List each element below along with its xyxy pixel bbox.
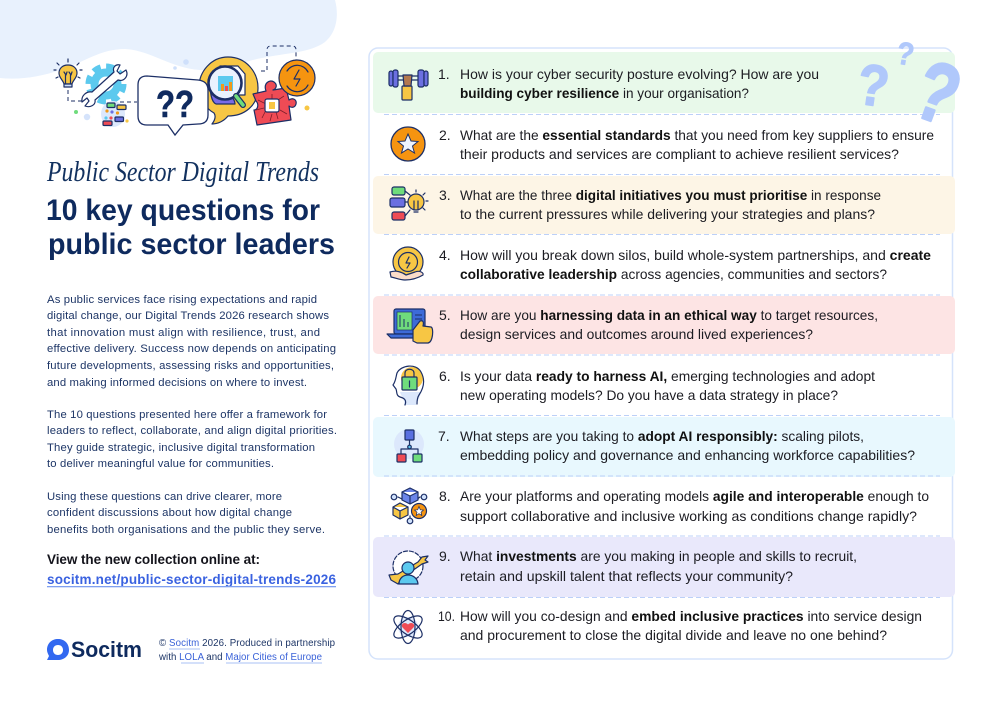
icon: hand and energy — [390, 247, 423, 280]
icon: head with padlock — [393, 366, 424, 405]
question 5: design services and outcomes around lived experiences? — [460, 326, 813, 342]
question 10: and procurement to close the digital divide and leave no one behind? — [460, 627, 887, 643]
call to action: View the new collection online at: — [47, 552, 260, 567]
framework paragraph: The 10 questions presented here offer a framework for — [47, 409, 327, 421]
decorative question marks — [853, 36, 973, 143]
question 7 — [394, 428, 915, 463]
hero illustration — [54, 46, 315, 135]
main heading: 10 key questions for — [46, 194, 320, 227]
intro paragraph — [47, 294, 336, 389]
question speech bubble: ?? — [156, 84, 194, 126]
question 10: 10. — [438, 608, 455, 624]
decorative question marks: ? — [853, 51, 893, 120]
question 3: to the current pressures while delivering your strategies and plans? — [460, 206, 875, 222]
yellow speech bubble and magnifier — [199, 57, 258, 124]
copyright note: with LOLA and Major Cities of Europe — [158, 652, 322, 663]
closing paragraph: confident discussions about how digital change — [47, 507, 292, 519]
background blob — [0, 0, 337, 79]
decorative question marks: ? — [903, 42, 973, 143]
question 5: 5. — [439, 307, 451, 323]
question 4: 4. — [439, 247, 451, 263]
question 5 — [387, 307, 878, 343]
icon: decision flow — [394, 429, 424, 462]
closing paragraph — [47, 491, 325, 536]
intro paragraph: digital change, our Digital Trends 2026 research shows — [47, 310, 329, 322]
decorative question marks: ? — [894, 36, 917, 73]
icon: person with gear and wrench — [389, 551, 428, 584]
question 2: their products and services are compliant to achieve resilient services? — [460, 146, 899, 162]
framework paragraph — [47, 409, 337, 470]
intro paragraph: effective delivery. Success now depends on anticipating — [47, 343, 336, 355]
question 2: 2. — [439, 127, 451, 143]
question 3: 3. — [439, 187, 451, 203]
copyright note: © Socitm 2026. Produced in partnership — [159, 638, 335, 649]
question 1 — [389, 66, 819, 101]
question 10 — [390, 608, 922, 644]
icon: atom with heart — [390, 610, 426, 644]
question 8 — [391, 488, 929, 524]
question 9 — [389, 548, 857, 584]
framework paragraph: They guide strategic, inclusive digital transformation — [47, 442, 315, 454]
colour blocks — [101, 101, 129, 127]
call to action — [47, 552, 336, 587]
question 7: What steps are you taking to adopt AI responsibly: scaling pilots, — [460, 428, 864, 444]
question 8: 8. — [439, 488, 451, 504]
framework paragraph: to deliver meaningful value for communities. — [47, 458, 274, 470]
question 5: How are you harnessing data in an ethical way to target resources, — [460, 307, 878, 323]
call to action: socitm.net/public-sector-digital-trends-2026 — [47, 572, 336, 587]
framework paragraph: leaders to reflect, collaborate, and align digital priorities. — [47, 425, 337, 437]
icon: connected cubes — [391, 488, 427, 524]
question 7: embedding policy and governance and enhancing workforce capabilities? — [460, 447, 915, 463]
main heading — [46, 194, 335, 261]
intro paragraph: future developments, assessing risks and opportunities, — [47, 360, 334, 372]
question 1: How is your cyber security posture evolving? How are you — [460, 66, 819, 82]
question 9: 9. — [439, 548, 451, 564]
question 6: new operating models? Do you have a data strategy in place? — [460, 387, 838, 403]
question 8: Are your platforms and operating models agile and interoperable enough to — [460, 488, 929, 504]
icon: star badge — [391, 127, 425, 161]
row backgrounds — [373, 52, 955, 597]
main heading: public sector leaders — [48, 228, 335, 261]
Socitm logo: Socitm — [71, 637, 142, 662]
icon: dumbbell — [389, 70, 428, 100]
questions panel — [369, 48, 952, 659]
question 3 — [390, 187, 881, 222]
question 1: 1. — [438, 66, 450, 82]
question 1: building cyber resilience in your organisation? — [460, 85, 749, 101]
bulb — [54, 59, 82, 87]
question 10: How will you co-design and embed inclusive practices into service design — [460, 608, 922, 624]
question 6: Is your data ready to harness AI, emerging technologies and adopt — [460, 368, 875, 384]
question 4: collaborative leadership across agencies, communities and sectors? — [460, 266, 887, 282]
question speech bubble — [138, 76, 208, 135]
red puzzle — [253, 81, 296, 125]
intro paragraph: and making informed decisions on where to invest. — [47, 377, 307, 389]
icon: laptop and thumbs up — [387, 309, 433, 343]
question 4 — [390, 247, 931, 282]
question 8: support collaborative and inclusive working as conditions change rapidly? — [460, 508, 917, 524]
gear and wrench — [82, 65, 127, 107]
question 7: 7. — [438, 428, 450, 444]
question 4: How will you break down silos, build whole-system partnerships, and create — [460, 247, 931, 263]
question 2 — [391, 127, 934, 162]
question 9: retain and upskill talent that reflects your community? — [460, 568, 793, 584]
question 6: 6. — [439, 368, 451, 384]
question 2: What are the essential standards that you need from key suppliers to ensure — [460, 127, 934, 143]
icon: initiatives and bulb — [390, 187, 428, 220]
question 9: What investments are you making in people and skills to recruit, — [460, 548, 857, 564]
copyright note — [158, 638, 335, 663]
intro paragraph: As public services face rising expectations and rapid — [47, 294, 317, 306]
question 3: What are the three digital initiatives you must prioritise in response — [460, 187, 881, 203]
script title: Public Sector Digital Trends — [46, 157, 319, 188]
question 6 — [393, 366, 875, 405]
intro paragraph: that innovation must align with resilience, trust, and — [47, 327, 320, 339]
closing paragraph: Using these questions can drive clearer, more — [47, 491, 282, 503]
closing paragraph: benefits both organisations and the public they serve. — [47, 524, 325, 536]
orange energy circle — [279, 60, 315, 96]
